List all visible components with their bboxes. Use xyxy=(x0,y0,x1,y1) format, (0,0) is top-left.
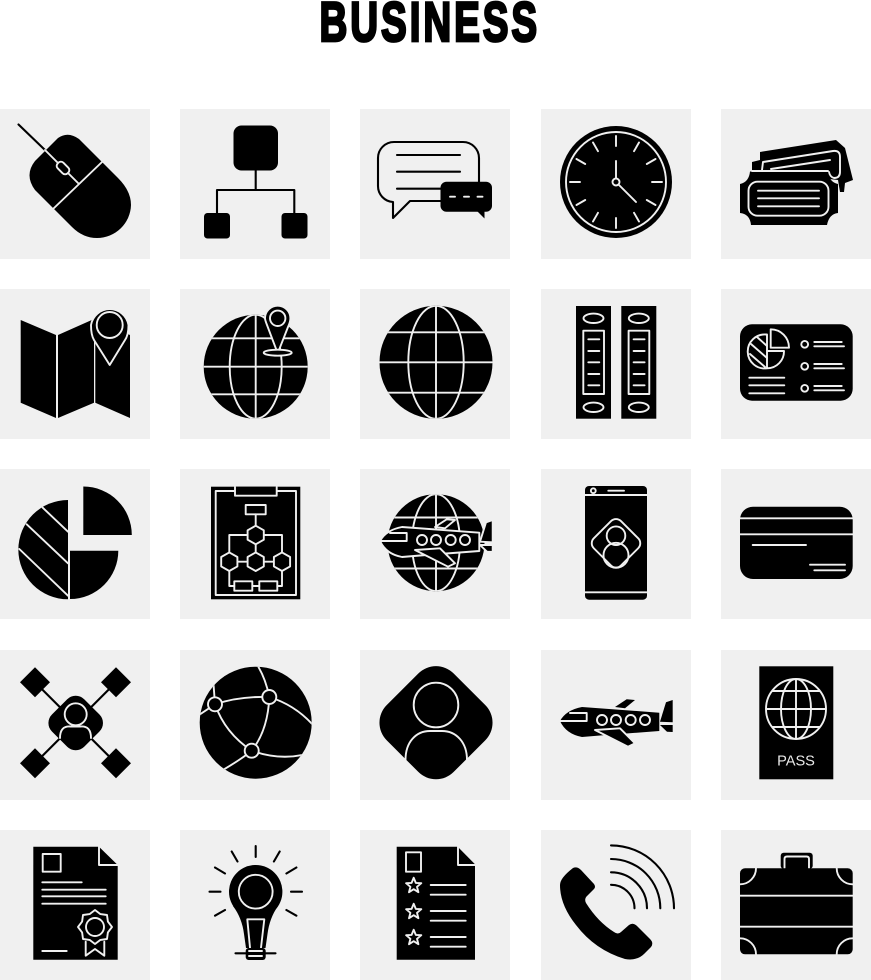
panel: certificate xyxy=(0,830,150,980)
icon: user badge xyxy=(369,656,503,790)
panel: network person xyxy=(0,650,150,800)
icon: globe xyxy=(380,306,492,419)
panel: folded map xyxy=(0,289,150,439)
panel: passport xyxy=(721,650,871,800)
icon: wall clock xyxy=(560,126,672,238)
icon: tickets xyxy=(740,140,853,225)
icon: idea bulb xyxy=(210,846,302,960)
panel: tickets xyxy=(721,109,871,259)
icon: certificate document xyxy=(33,847,118,960)
icon: exploded pie xyxy=(18,486,132,599)
panel: report card xyxy=(721,289,871,439)
panel: credit card xyxy=(721,469,871,619)
icon: org chart xyxy=(204,126,308,238)
icon: review document xyxy=(397,847,475,960)
icon: phone with profile xyxy=(585,486,647,600)
panel: airplane xyxy=(541,650,691,800)
icon: left binder xyxy=(576,306,611,419)
icon: flowchart clipboard xyxy=(211,487,300,599)
icon: briefcase xyxy=(740,853,853,954)
icon: globe location xyxy=(204,306,308,419)
panel: profile xyxy=(360,650,510,800)
icon: connected user xyxy=(20,667,131,778)
panel: mouse xyxy=(0,109,150,259)
icon: phone handset xyxy=(560,845,674,959)
icon: passport xyxy=(759,666,833,779)
panel: pie chart xyxy=(0,469,150,619)
panel: light bulb xyxy=(180,830,330,980)
panel: globe with plane xyxy=(360,469,510,619)
label: PASS: PASS xyxy=(777,754,815,770)
panel: globe xyxy=(360,289,510,439)
panel: hierarchy xyxy=(180,109,330,259)
icon: map with pin xyxy=(21,309,130,418)
icon: credit card xyxy=(740,507,853,579)
icon: computer mouse xyxy=(18,124,131,238)
icon: right binder xyxy=(621,306,656,419)
panel: telephone xyxy=(541,830,691,980)
panel: clock xyxy=(541,109,691,259)
panel: binders xyxy=(541,289,691,439)
icon: dashboard card xyxy=(740,324,853,401)
panel: clipboard xyxy=(180,469,330,619)
icon: speech bubbles xyxy=(378,142,492,218)
panel: chat xyxy=(360,109,510,259)
panel: globe with pin xyxy=(180,289,330,439)
panel: briefcase xyxy=(721,830,871,980)
panel: network globe xyxy=(180,650,330,800)
panel: rated list xyxy=(360,830,510,980)
icon: airplane xyxy=(560,699,673,747)
icon: globe network xyxy=(199,667,313,779)
icon: world travel xyxy=(382,494,492,592)
panel: smartphone xyxy=(541,469,691,619)
